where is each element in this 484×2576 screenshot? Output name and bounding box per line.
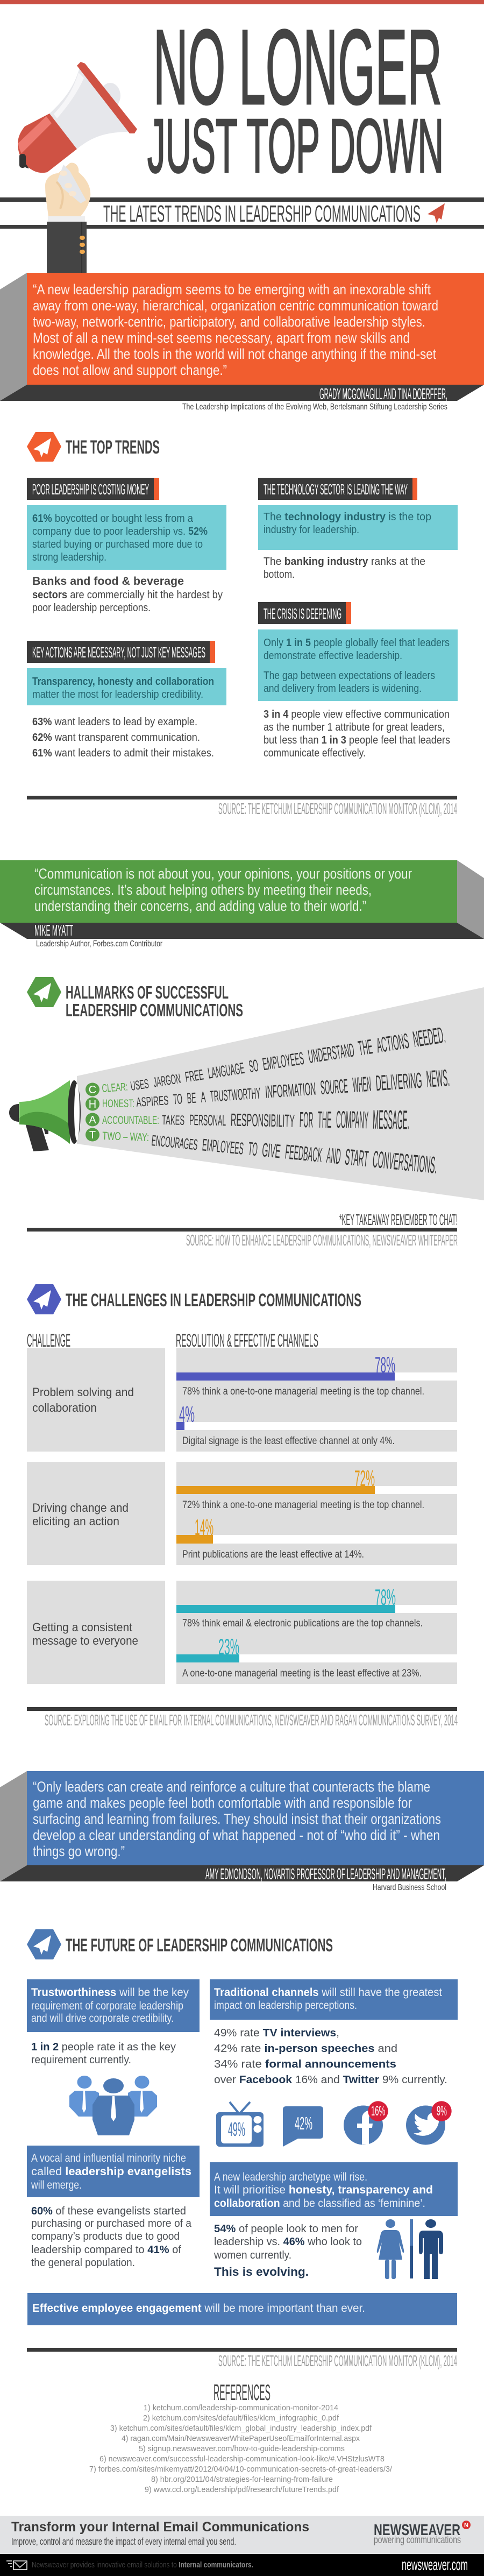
panel: key actions: matter the most for leadership credibility. (32, 689, 203, 700)
icon: TV 49%: 49% (228, 2118, 245, 2140)
references list: 8) hbr.org/2011/04/strategies-for-learning-from-failure (151, 2475, 333, 2484)
quote author: Leadership Author, Forbes.com Contributor (36, 939, 163, 949)
row: consistent message: message to everyone (32, 1634, 138, 1647)
panel: new archetype (210, 2162, 458, 2278)
item: accountable: THE (318, 1107, 332, 1133)
panel: traditional channels: over Facebook 16% and Twitter 9% currently. (214, 2074, 447, 2086)
icon: Facebook 16%: 16% (371, 2104, 385, 2119)
panel: green quote: understanding their concerns, and adding value to their world.” (34, 898, 366, 914)
item: honest: WHEN (352, 1073, 372, 1097)
item: honest: A (200, 1088, 206, 1106)
row: driving change: Driving change and (32, 1501, 129, 1515)
panel: employee engagement: Effective employee engagement will be more important than ever. (32, 2302, 365, 2315)
panel: leadership evangelists: purchasing or purchased more of a (31, 2218, 192, 2230)
item: clear: UNDERSTAND (307, 1039, 355, 1067)
panel: leadership evangelists: will emerge. (31, 2179, 82, 2191)
row: driving change: 14% (195, 1515, 213, 1540)
item: honest: BE (187, 1089, 197, 1107)
panel: crisis deepening: as the number 1 attribute for great leaders, (264, 721, 445, 733)
panel: key actions: 63% want leaders to lead by example. (32, 716, 197, 728)
icon: man (419, 2219, 443, 2279)
item: two-way (86, 1128, 438, 1179)
item: accountable: FOR (299, 1107, 314, 1132)
item: accountable: A (89, 1114, 96, 1126)
panel: new archetype: This is evolving. (214, 2265, 309, 2278)
panel: green quote: “Communication is not about you, your opinions, your positions or your (34, 866, 412, 882)
item: clear: EMPLOYEES (261, 1049, 305, 1074)
footer banner: Transform your Internal Email Communications (11, 2520, 309, 2535)
references list (89, 2403, 393, 2494)
panel: traditional channels: 34% rate formal announcements (214, 2058, 396, 2070)
text: CHALLENGE (27, 1331, 70, 1351)
item: accountable: COMPANY (336, 1106, 369, 1134)
panel: traditional channels: Traditional channels will still have the greatest (214, 1986, 442, 1999)
icon: red paper plane (428, 203, 445, 223)
item: clear: JARGON (152, 1071, 182, 1090)
row: driving change: 72% (354, 1466, 375, 1491)
icon: purple hexagon with plane (27, 1284, 61, 1314)
item: accountable: ACCOUNTABLE: (102, 1114, 159, 1127)
item: two-way: EMPLOYEES (202, 1135, 245, 1158)
panel: orange quote (0, 273, 484, 403)
text: REFERENCES (213, 2380, 271, 2405)
references list: 9) www.ccl.org/Leadership/pdf/research/futureTrends.pdf (145, 2485, 339, 2494)
item: honest (86, 1065, 450, 1110)
panel: key actions: 62% want transparent communication. (32, 732, 200, 744)
icon: megaphone held in a hand (18, 62, 137, 216)
panel: leadership evangelists: leadership compared to 41% of (31, 2244, 181, 2256)
panel: green quote: MIKE MYATT (34, 922, 73, 939)
panel: crisis deepening: 3 in 4 people view effective communication (264, 709, 450, 720)
panel: trustworthiness: Trustworthiness will be the key (31, 1986, 189, 1999)
panel: technology sector: The banking industry ranks at the (264, 556, 425, 568)
row: problem solving: Problem solving and (32, 1385, 134, 1399)
panel: new archetype: It will prioritise honesty, transparency and (214, 2184, 433, 2196)
panel: green quote (0, 860, 484, 939)
item: honest: TO (173, 1091, 183, 1107)
logo: Newsweaver (374, 2521, 471, 2546)
row: problem solving: collaboration (32, 1401, 97, 1414)
item: honest: HONEST: (102, 1098, 134, 1110)
item: honest: TRUSTWORTHY (209, 1085, 261, 1106)
quote source: Harvard Business School (373, 1883, 446, 1892)
references list: 6) newsweaver.com/successful-leadership-communication-look-like/#.VHStzlusWT8 (99, 2454, 385, 2464)
item: honest: ASPIRES (136, 1093, 169, 1110)
panel: leadership evangelists: called leadership evangelists (31, 2165, 191, 2178)
panel: poor leadership (27, 478, 226, 614)
divider bar (410, 2219, 413, 2278)
heading: hallmarks: LEADERSHIP COMMUNICATIONS (66, 1000, 243, 1020)
row: consistent message: 78% (375, 1584, 396, 1610)
panel: poor leadership: sectors are commercially hit the hardest by (32, 589, 223, 601)
row: consistent message: A one-to-one managerial meeting is the least effective at 23%. (182, 1668, 422, 1679)
panel: traditional channels (210, 1979, 458, 2086)
panel: new archetype: women currently. (213, 2249, 291, 2261)
heading: hallmarks: HALLMARKS OF SUCCESSFUL (66, 982, 229, 1002)
item: accountable: RESPONSIBILITY (231, 1110, 295, 1131)
panel: leadership evangelists: 60% of these evangelists started (31, 2205, 186, 2217)
panel: green quote: circumstances. It’s about helping others by meeting their needs, (34, 882, 372, 898)
item: two-way: TWO – WAY: (102, 1130, 150, 1144)
panel: technology sector: The technology industry is the top (264, 511, 431, 523)
row: problem solving (27, 1348, 457, 1452)
icon: Facebook 16% (344, 2101, 388, 2145)
panel: crisis deepening: demonstrate effective leadership. (264, 650, 402, 662)
item: two-way: ENCOURAGES (151, 1132, 198, 1153)
panel: traditional channels: impact on leadership perceptions. (214, 1999, 357, 2012)
heading: hallmarks (66, 982, 243, 1020)
row: problem solving: Digital signage is the least effective channel at only 4%. (182, 1435, 395, 1447)
icon: three business people (69, 2076, 157, 2135)
panel: technology sector: industry for leadership. (264, 524, 359, 536)
row: consistent message (27, 1581, 457, 1684)
row: driving change: eliciting an action (32, 1515, 119, 1528)
sleeve with cuff and buttons (47, 216, 87, 273)
panel: poor leadership: company due to poor leadership vs. 52% (32, 526, 208, 537)
item: accountable: PERSONAL (189, 1112, 226, 1129)
panel: crisis deepening: but less than 1 in 3 people feel that leaders (264, 734, 450, 746)
panel: crisis deepening: and delivery from leaders is widening. (264, 683, 422, 695)
panel: blue quote: things go wrong.” (33, 1843, 125, 1859)
panel: leadership evangelists: the general population. (31, 2257, 135, 2269)
panel: employee engagement (27, 2293, 457, 2325)
panel: technology sector: bottom. (264, 569, 295, 581)
item: clear: ACTIONS (375, 1029, 410, 1057)
item: clear (86, 1022, 447, 1096)
item: clear: SO (247, 1056, 260, 1076)
panel: poor leadership: POOR LEADERSHIP IS COSTING MONEY (32, 481, 149, 498)
icon: woman (377, 2219, 404, 2279)
icon: speech bubble 42%: 42% (295, 2113, 312, 2133)
panel: trustworthiness: and will drive corporate credibility. (31, 2012, 174, 2025)
panel: poor leadership: poor leadership perceptions. (32, 602, 151, 614)
icon: Twitter 9%: 9% (437, 2104, 447, 2119)
heading: the top trends: THE TOP TRENDS (66, 437, 160, 458)
top red bar (0, 0, 484, 4)
item: accountable: TAKES (162, 1113, 184, 1128)
panel: trustworthiness: requirement of corporate leadership (31, 2000, 183, 2012)
item: two-way: FEEDBACK (284, 1140, 323, 1166)
item: clear: USES (130, 1077, 150, 1094)
panel: new archetype: collaboration and be classified as ‘feminine’. (214, 2197, 425, 2210)
references list: 3) ketchum.com/sites/default/files/klcm_global_industry_leadership_index.pdf (110, 2424, 372, 2433)
text: KEY ACTIONS ARE NECESSARY, NOT JUST KEY MESSAGES (32, 644, 205, 661)
row: driving change: Print publications are the least effective at 14%. (182, 1549, 364, 1560)
row: driving change: 72% think a one-to-one managerial meeting is the top channel. (182, 1499, 424, 1511)
item: clear: THE (357, 1035, 374, 1060)
panel: traditional channels: 42% rate in-person speeches and (214, 2043, 397, 2055)
item: honest: SOURCE (320, 1075, 348, 1099)
panel: crisis deepening: Only 1 in 5 people globally feel that leaders (264, 637, 450, 649)
references list: 4) ragan.com/Main/NewsweaverWhitePaperUseofEmailforInternal.aspx (122, 2434, 360, 2443)
title (147, 8, 444, 189)
icon: TV 49% (216, 2102, 264, 2147)
bottom black bar: Newsweaver provides innovative email solutions to Internal communicators. (32, 2560, 253, 2570)
icon: email (6, 2561, 27, 2570)
panel: leadership evangelists: company’s products due to good (31, 2231, 180, 2242)
row: problem solving: 4% (179, 1402, 195, 1427)
item: two-way: AND (325, 1143, 342, 1169)
item: accountable (86, 1105, 410, 1135)
beam of sound (77, 987, 484, 1200)
panel: blue quote (0, 1771, 484, 1883)
row: driving change (27, 1462, 457, 1565)
list: CHAT hallmarks (86, 1022, 450, 1179)
panel: blue quote: game and makes people feel both comfortable with and responsible for (33, 1795, 412, 1811)
panel: poor leadership: started buying or purchased more due to (32, 539, 203, 550)
panel: orange quote: Most of all a new mind-set seems necessary, apart from new skills and (33, 330, 410, 346)
row: consistent message: 78% think email & electronic publications are the top channels. (182, 1618, 423, 1629)
footer banner (0, 2516, 484, 2554)
row: problem solving: 78% (375, 1352, 395, 1377)
panel: key actions: Transparency, honesty and collaboration (32, 676, 214, 688)
panel: trustworthiness: requirement currently. (31, 2054, 131, 2066)
item: two-way: GIVE (261, 1138, 281, 1162)
panel: poor leadership: Banks and food & beverage (32, 575, 184, 588)
row: consistent message: 23% (218, 1634, 239, 1659)
icon: speech bubble 42% (283, 2106, 323, 2147)
icon: orange hexagon with plane (27, 432, 61, 462)
icon: green megaphone (9, 1080, 81, 1151)
panel: new archetype: 54% of people look to men for (214, 2223, 358, 2235)
item: two-way: TO (247, 1138, 259, 1160)
panel: crisis deepening (258, 602, 458, 759)
references list: 5) signup.newsweaver.com/how-to-guide-leadership-comms (139, 2444, 345, 2453)
icon: blue hexagon with plane (27, 1929, 61, 1959)
panel: leadership evangelists: A vocal and influential minority niche (31, 2152, 186, 2164)
panel: orange quote: does not allow and support change.” (33, 362, 227, 378)
panel: new archetype: leadership vs. 46% who look to (214, 2236, 362, 2248)
panel: crisis deepening: THE CRISIS IS DEEPENING (264, 605, 341, 622)
references list: 2) ketchum.com/sites/default/files/klcm_infographic_0.pdf (143, 2414, 339, 2423)
row: consistent message: Getting a consistent (32, 1620, 132, 1634)
item: clear: FREE (184, 1066, 204, 1085)
item: two-way: T (89, 1129, 96, 1141)
panel: technology sector (258, 478, 458, 581)
panel: traditional channels: 49% rate TV interviews , (214, 2027, 339, 2039)
panel: new archetype: A new leadership archetype will rise. (214, 2171, 367, 2183)
logo: Newsweaver: N (464, 2522, 468, 2529)
panel: key actions: 61% want leaders to admit their mistakes. (32, 747, 214, 759)
panel: trustworthiness: 1 in 2 people rate it as the key (31, 2041, 176, 2053)
icon: Twitter 9% (406, 2101, 452, 2145)
panel: crisis deepening: The gap between expectations of leaders (264, 670, 435, 682)
item: clear: C (89, 1084, 96, 1096)
panel: crisis deepening: communicate effectively. (264, 747, 366, 759)
item: clear: LANGUAGE (207, 1060, 246, 1082)
item: honest: H (89, 1099, 96, 1110)
icon: green hexagon with plane (27, 977, 61, 1007)
item: clear: CLEAR: (102, 1081, 128, 1095)
row: problem solving: 78% think a one-to-one managerial meeting is the top channel. (182, 1386, 424, 1397)
footer banner: Improve, control and measure the impact of every internal email you send. (11, 2536, 236, 2547)
panel: poor leadership: 61% boycotted or bought less from a (32, 513, 194, 525)
panel: key actions (27, 641, 226, 759)
references list: 1) ketchum.com/leadership-communication-monitor-2014 (144, 2403, 338, 2412)
item: two-way: START (344, 1144, 369, 1171)
references list: 7) forbes.com/sites/mikemyatt/2012/04/04/10-communication-secrets-of-great-leaders/3/ (89, 2465, 393, 2474)
panel: poor leadership: strong leadership. (32, 551, 106, 563)
item: honest: INFORMATION (265, 1079, 316, 1102)
panel: leadership evangelists (27, 2146, 200, 2269)
bottom black bar (0, 2554, 484, 2576)
panel: trustworthiness (27, 1979, 200, 2066)
